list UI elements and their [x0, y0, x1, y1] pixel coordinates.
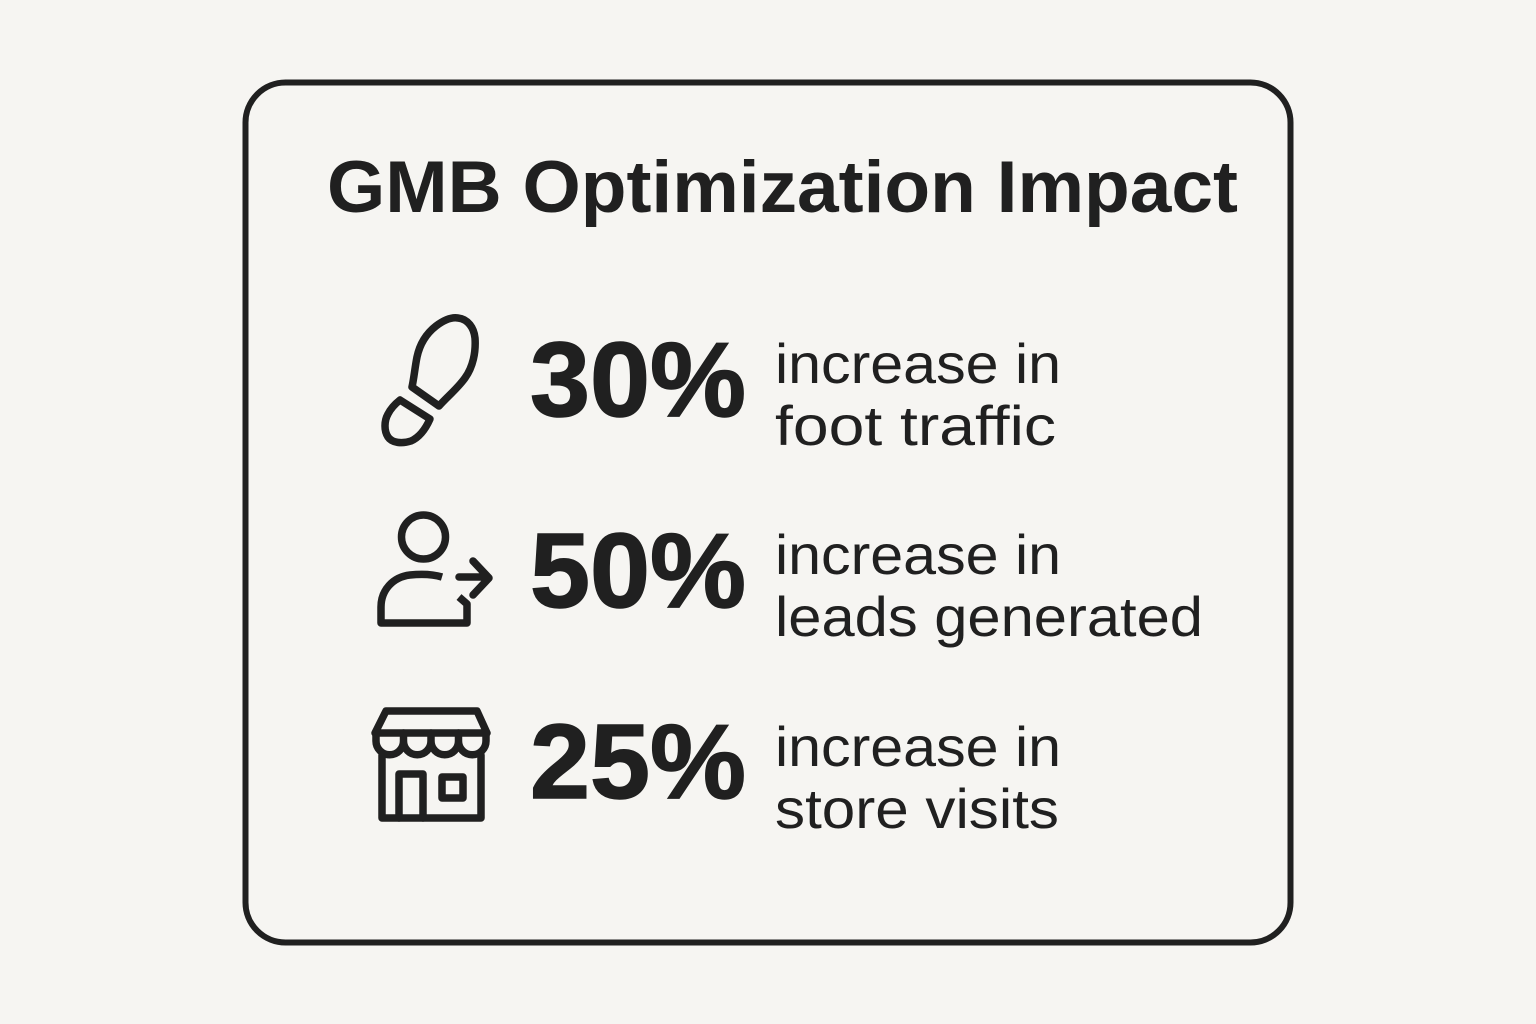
- label: increase in foot traffic: [775, 332, 1061, 457]
- label: increase in leads generated: [775, 523, 1203, 648]
- label: increase in foot traffic: increase in: [775, 332, 1061, 395]
- label: increase in store visits: [775, 715, 1061, 840]
- panel frame: [246, 82, 1290, 942]
- stat: 30%: 30%: [530, 321, 746, 439]
- stat: 50%: 50%: [530, 512, 746, 630]
- row: foot traffic: [385, 318, 1061, 457]
- icon: shoe print: [385, 318, 475, 443]
- panel: GMB optimization impact: [246, 82, 1290, 942]
- title: GMB Optimization Impact: [327, 147, 1238, 228]
- stat: 25%: 25%: [530, 703, 746, 821]
- label: increase in store visits: store visits: [775, 777, 1059, 840]
- label: increase in store visits: increase in: [775, 715, 1061, 778]
- icon: person with arrow: [381, 515, 489, 623]
- row: leads generated: [381, 512, 1203, 648]
- icon: storefront: [375, 711, 487, 818]
- label: increase in foot traffic: foot traffic: [775, 394, 1056, 457]
- row: store visits: [375, 703, 1061, 840]
- label: increase in leads generated: leads generated: [775, 585, 1203, 648]
- label: increase in leads generated: increase in: [775, 523, 1061, 586]
